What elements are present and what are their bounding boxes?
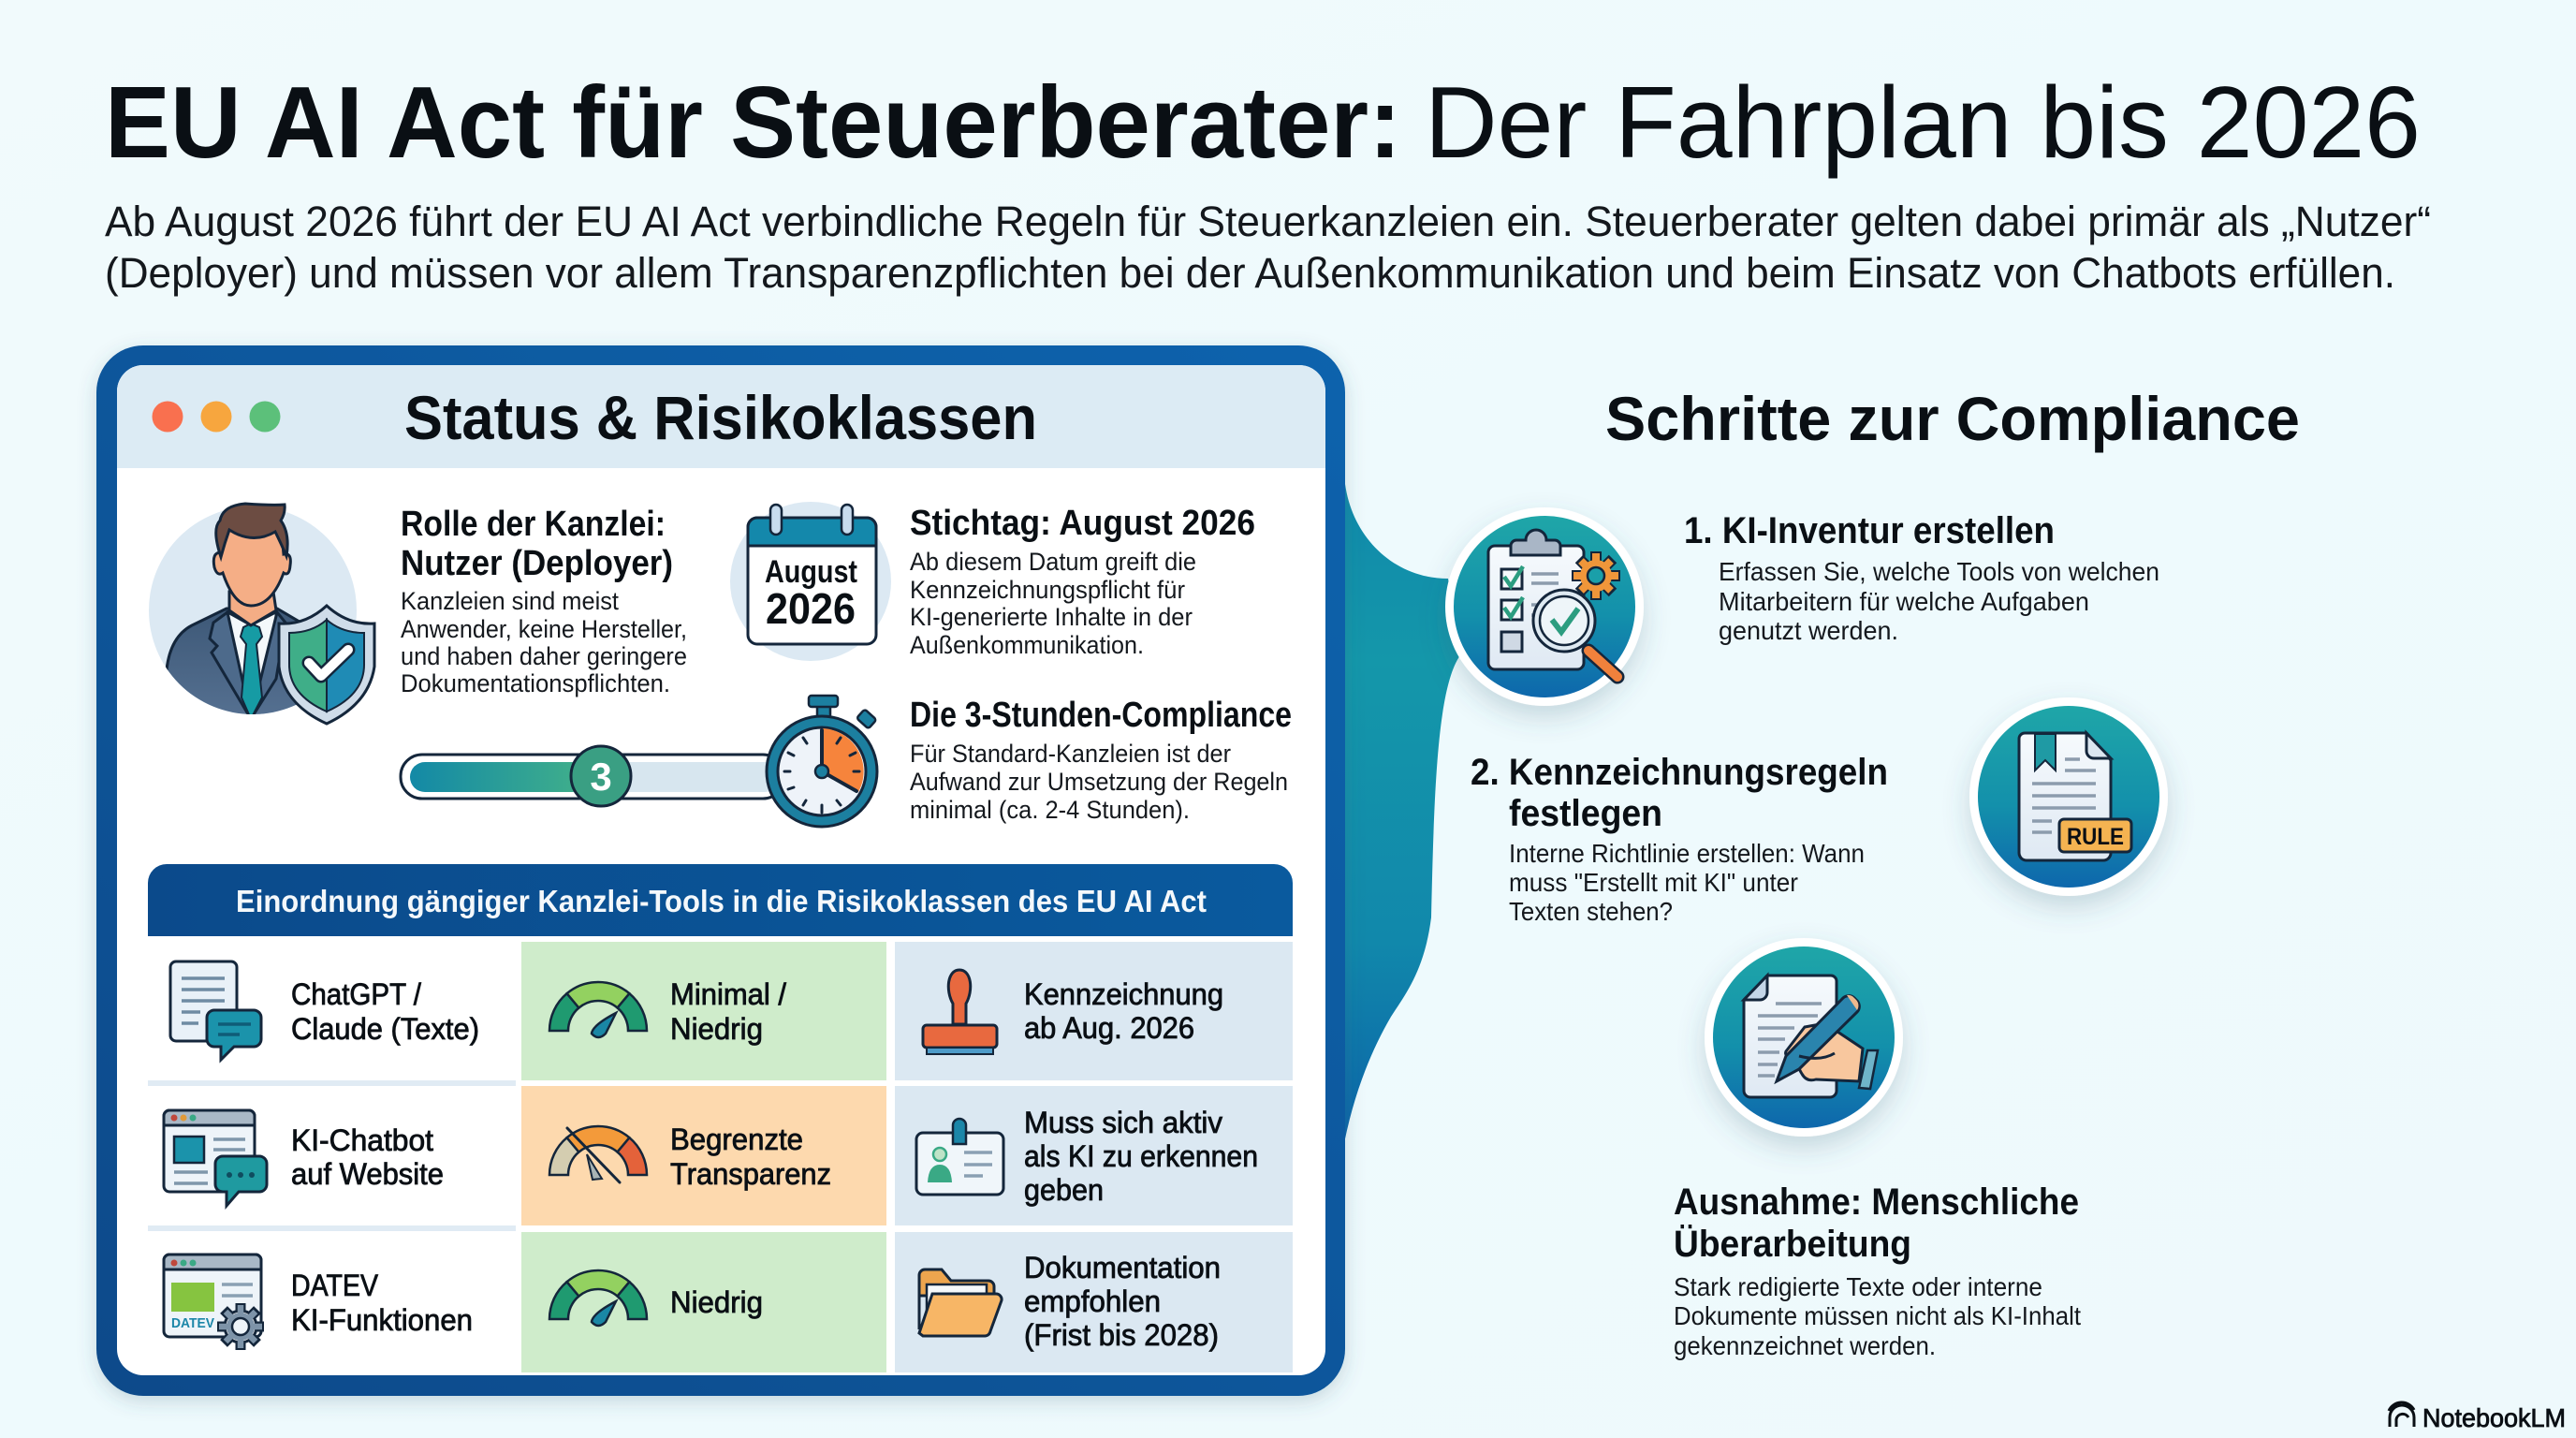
intro text: Ab August 2026 führt der EU AI Act verbindliche Regeln für Steuerkanzleien ein. Steuerberater gelten dabei primär als „Nutzer“ [105, 198, 2431, 245]
text block: step 2 [1471, 752, 1888, 926]
row 2: KI-Chatbot [164, 1110, 444, 1206]
text block: 3-Stunden-Compliance: Aufwand zur Umsetzung der Regeln [910, 768, 1288, 796]
text block: 3-Stunden-Compliance: Die 3-Stunden-Compliance [910, 696, 1292, 735]
row 3: DATEV KI-Funktionen: DATEV [291, 1269, 379, 1302]
text block: step 1: Mitarbeitern für welche Aufgaben [1719, 587, 2089, 616]
title: Der Fahrplan bis 2026 [1425, 66, 2421, 180]
icon: green gauge [549, 1270, 647, 1326]
connector from panel to steps [1339, 449, 1460, 1153]
icon: step 3 hand writing [1705, 938, 1903, 1137]
cell: Dokumentation empfohlen: (Frist bis 2028) [1024, 1318, 1219, 1352]
text block: Rolle der Kanzlei: und haben daher geringere [401, 642, 687, 670]
heading: Schritte zur Compliance: Schritte zur Compliance [1605, 384, 2300, 453]
title: EU AI Act für Steuerberater: [105, 66, 1401, 180]
icon: calendar August 2026: August [765, 554, 857, 590]
intro text: (Deployer) und müssen vor allem Transparenzpflichten bei der Außenkommunikation und beim Einsatz von Chatbots erfüllen. [105, 249, 2395, 297]
panel heading: Status & Risikoklassen [404, 383, 1037, 452]
text block: Stichtag [910, 504, 1255, 659]
cell: Kennzeichnung ab Aug. 2026: ab Aug. 2026 [1024, 1011, 1194, 1045]
table row dividers [148, 1080, 516, 1231]
text block: Stichtag: KI-generierte Inhalte in der [910, 603, 1193, 631]
text block: Stichtag: Kennzeichnungspflicht für [910, 576, 1185, 604]
icon: document with chat bubble [170, 961, 261, 1060]
NotebookLM logo: NotebookLM [2422, 1403, 2566, 1432]
row 2: KI-Chatbot: KI-Chatbot [291, 1123, 433, 1157]
text block: Ausnahme: gekennzeichnet werden. [1674, 1331, 1936, 1360]
text block: Stichtag: Stichtag: August 2026 [910, 504, 1255, 543]
panel: Status & Risikoklassen [96, 345, 1345, 1396]
cell: Dokumentation empfohlen [895, 1232, 1293, 1372]
row 2: KI-Chatbot: auf Website [291, 1157, 444, 1191]
cell: Muss sich aktiv als KI zu erkennen geben: geben [1024, 1173, 1104, 1207]
cell: Kennzeichnung ab Aug. 2026: Kennzeichnung [1024, 977, 1223, 1011]
text block: step 1: genutzt werden. [1719, 616, 1898, 645]
icon: step 2 rule document [1969, 697, 2168, 896]
progress bar with badge 3: 3 [590, 755, 612, 799]
table header: Einordnung gängiger Kanzlei-Tools in die Risikoklassen des EU AI Act [236, 884, 1207, 918]
text block: 3-Stunden-Compliance: Für Standard-Kanzleien ist der [910, 740, 1231, 768]
icon: browser with chat bubble [164, 1110, 267, 1206]
icon: DATEV window with gear [164, 1255, 264, 1350]
text block: Stichtag: Außenkommunikation. [910, 631, 1144, 659]
cell: Kennzeichnung ab Aug. 2026 [895, 942, 1293, 1080]
icon: stopwatch [767, 696, 877, 827]
cell: Muss sich aktiv als KI zu erkennen geben: als KI zu erkennen [1024, 1139, 1258, 1173]
text block: Stichtag: Ab diesem Datum greift die [910, 548, 1196, 576]
text block: Ausnahme: Überarbeitung [1674, 1223, 1911, 1265]
icon: ID badge [916, 1119, 1003, 1195]
text block: Rolle der Kanzlei [401, 505, 687, 697]
text block: 3-Stunden-Compliance [910, 696, 1292, 824]
cell: Begrenzte Transparenz: Transparenz [670, 1157, 831, 1191]
row 1: ChatGPT / Claude: ChatGPT / [291, 977, 421, 1011]
cell: Dokumentation empfohlen: empfohlen [1024, 1284, 1161, 1318]
text block: Ausnahme [1674, 1181, 2081, 1360]
text block: Rolle der Kanzlei: Anwender, keine Hersteller, [401, 615, 687, 643]
cell: Muss sich aktiv als KI zu erkennen geben: Muss sich aktiv [1024, 1106, 1222, 1139]
text block: step 1: Erfassen Sie, welche Tools von welchen [1719, 557, 2159, 586]
cell: Minimal / Niedrig: Niedrig [670, 1012, 763, 1046]
table header [148, 864, 1293, 936]
text block: Ausnahme: Ausnahme: Menschliche [1674, 1181, 2079, 1223]
row 3: DATEV KI-Funktionen [164, 1255, 473, 1350]
cell: Minimal / Niedrig [521, 942, 886, 1080]
icon: DATEV window with gear: DATEV [171, 1315, 214, 1331]
cell: Niedrig [521, 1232, 886, 1372]
text block: step 2: 2. Kennzeichnungsregeln [1471, 752, 1888, 793]
cell: Niedrig: Niedrig [670, 1285, 763, 1319]
text block: Rolle der Kanzlei: Nutzer (Deployer) [401, 544, 673, 583]
text block: 3-Stunden-Compliance: minimal (ca. 2-4 Stunden). [910, 796, 1190, 824]
row 1: ChatGPT / Claude: Claude (Texte) [291, 1012, 479, 1046]
text block: Rolle der Kanzlei: Kanzleien sind meist [401, 587, 619, 615]
icon: advisor with shield [149, 504, 374, 740]
text block: step 2: Texten stehen? [1509, 897, 1673, 926]
icon: step 2 rule document: RULE [2067, 824, 2124, 850]
icon: folder [919, 1269, 1002, 1336]
icon: orange gauge crossed out [549, 1126, 647, 1182]
row 1: ChatGPT / Claude [170, 961, 479, 1060]
cell: Begrenzte Transparenz: Begrenzte [670, 1123, 803, 1156]
icon: step 1 checklist [1445, 507, 1644, 706]
cell: Minimal / Niedrig: Minimal / [670, 977, 786, 1011]
cell: Dokumentation empfohlen: Dokumentation [1024, 1251, 1221, 1284]
text block: step 2: Interne Richtlinie erstellen: Wann [1509, 839, 1865, 868]
text block: Rolle der Kanzlei: Dokumentationspflichten. [401, 669, 670, 697]
progress bar with badge 3 [401, 746, 784, 806]
icon: calendar August 2026 [730, 502, 891, 661]
cell: Begrenzte Transparenz [521, 1086, 886, 1225]
text block: Rolle der Kanzlei: Rolle der Kanzlei: [401, 505, 666, 544]
text block: Ausnahme: Stark redigierte Texte oder interne [1674, 1272, 2042, 1301]
text block: Ausnahme: Dokumente müssen nicht als KI-Inhalt [1674, 1301, 2081, 1330]
row 3: DATEV KI-Funktionen: KI-Funktionen [291, 1303, 473, 1337]
text block: step 1: 1. KI-Inventur erstellen [1684, 510, 2055, 551]
icon: calendar August 2026: 2026 [766, 584, 856, 633]
title [105, 66, 2421, 180]
icon: stamp [923, 970, 997, 1054]
cell: Muss sich aktiv als KI zu erkennen geben [895, 1086, 1293, 1225]
window dots [152, 401, 281, 433]
text block: step 2: festlegen [1509, 793, 1662, 834]
intro text [105, 198, 2431, 297]
icon: green gauge [549, 982, 647, 1037]
text block: step 2: muss "Erstellt mit KI" unter [1509, 868, 1798, 897]
text block: step 1 [1684, 510, 2159, 645]
